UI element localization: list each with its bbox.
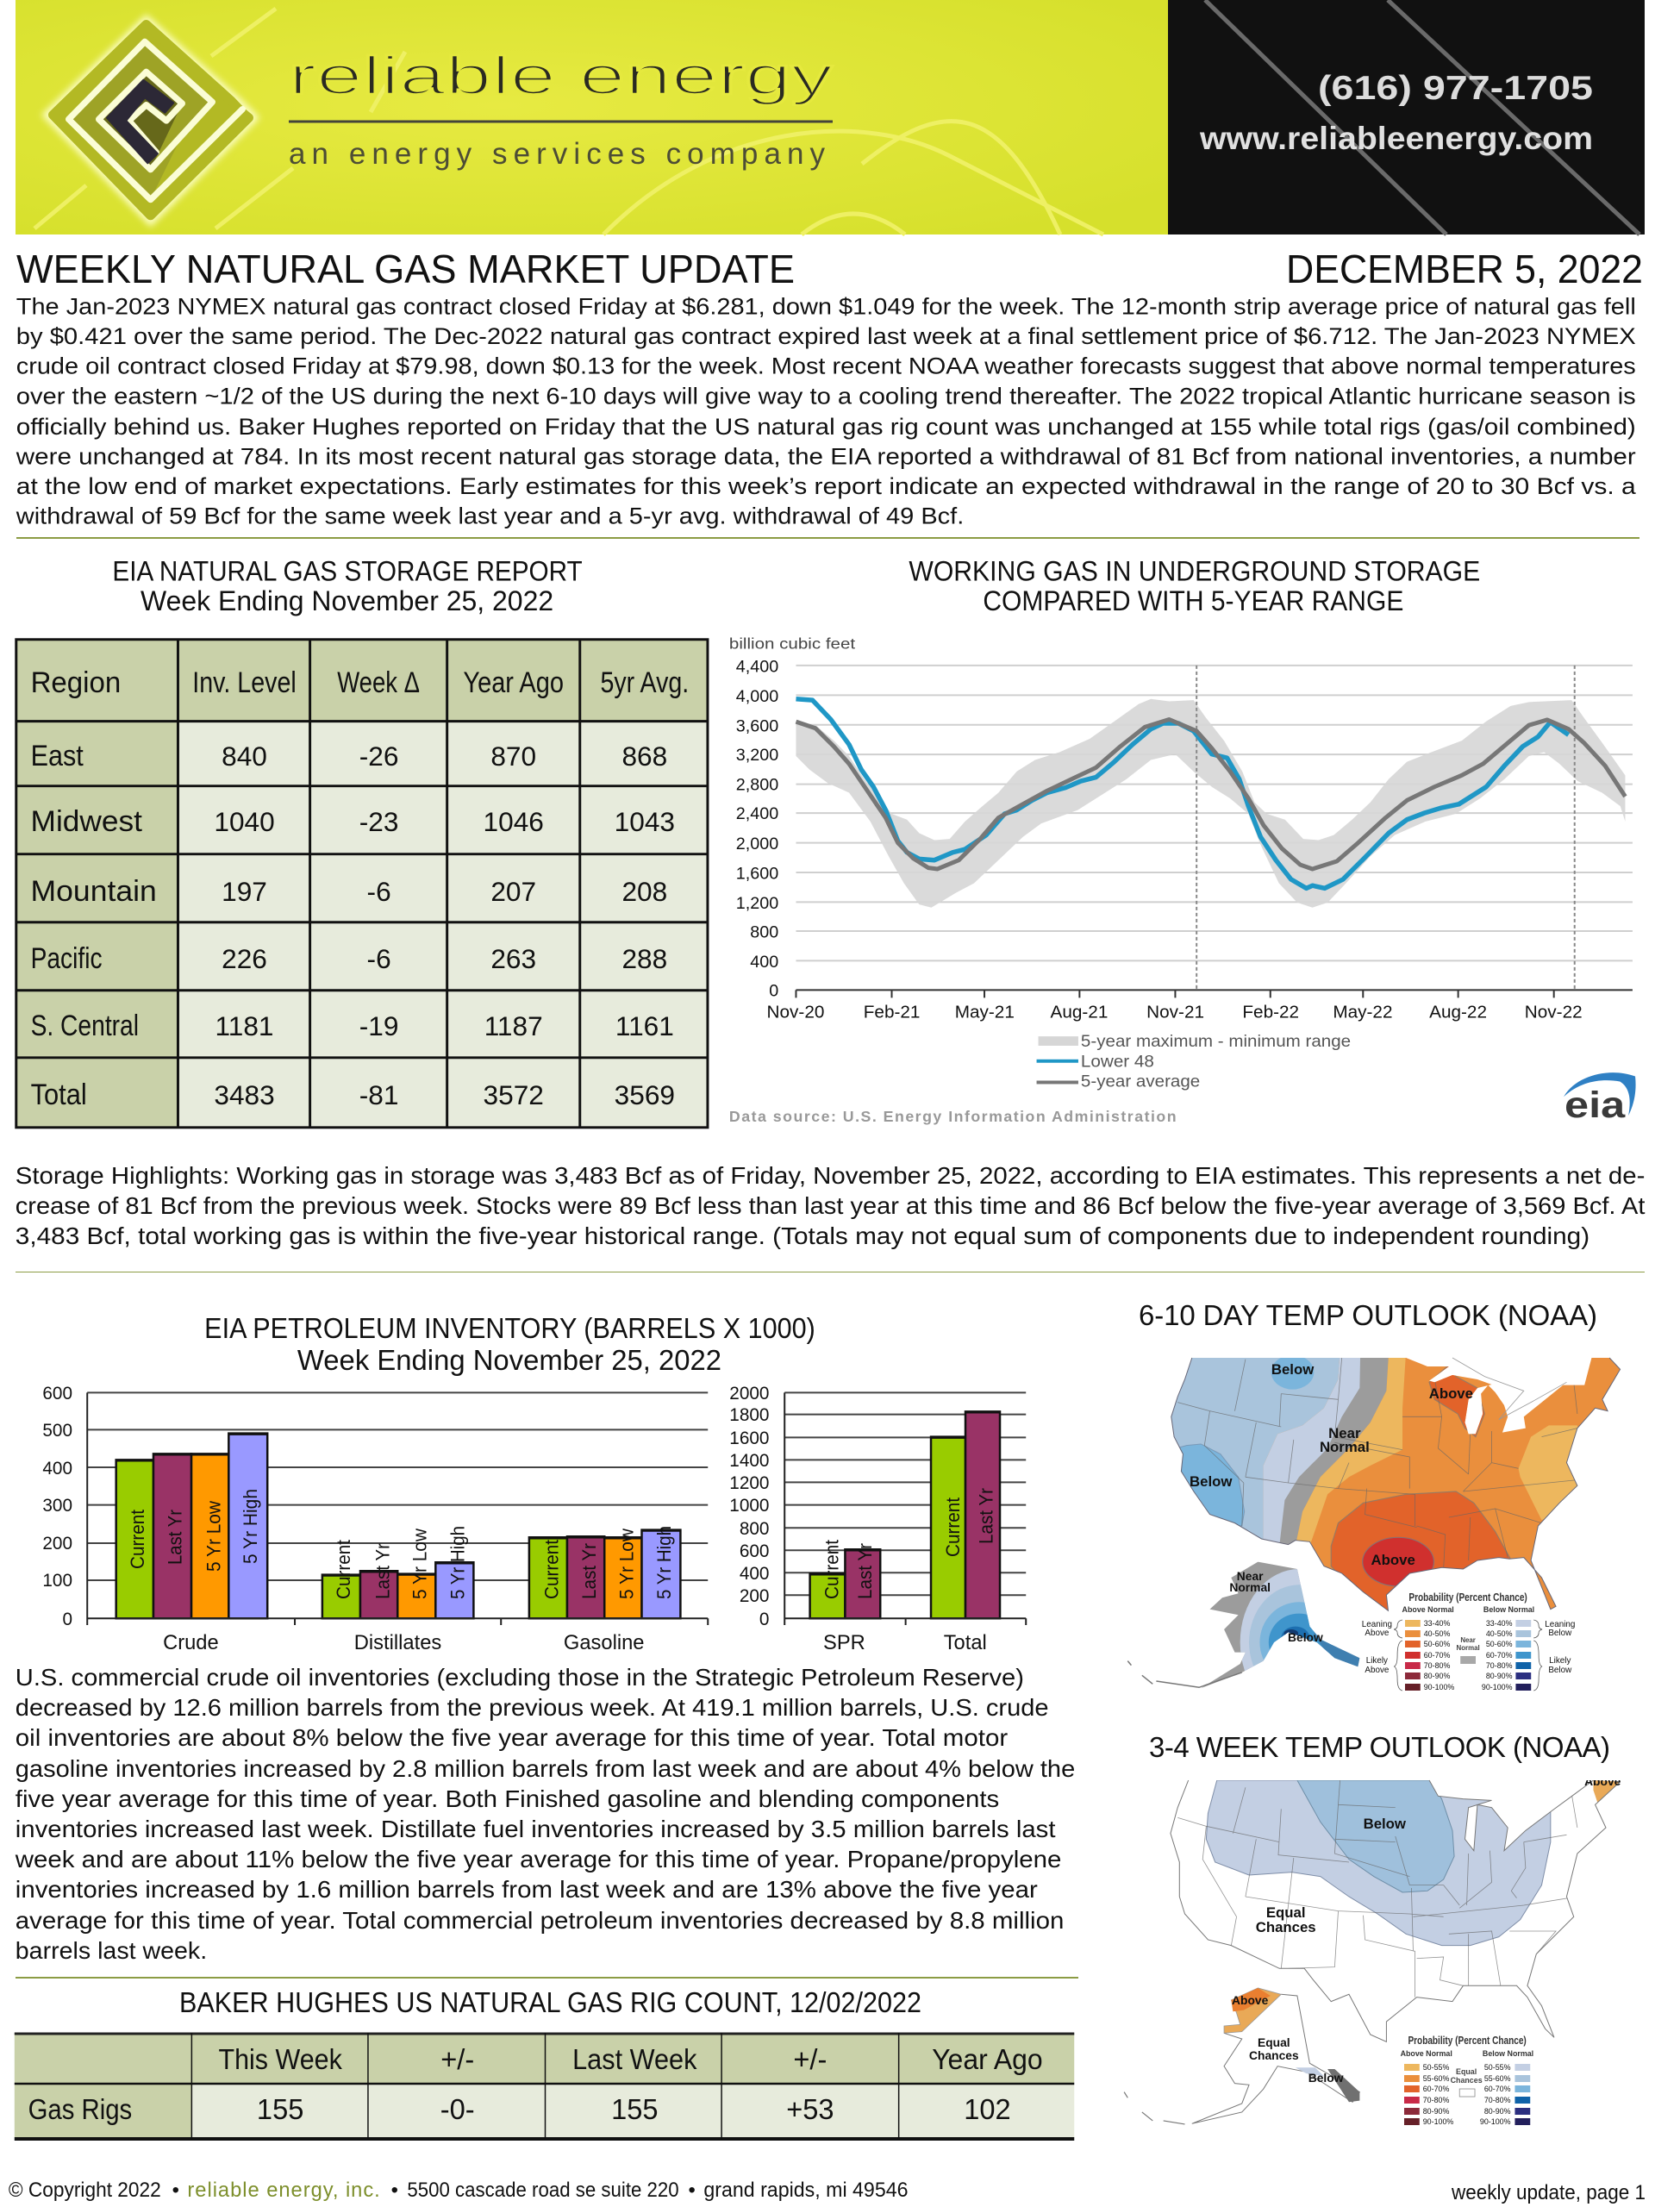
storage table [16, 640, 708, 1128]
tagline: an energy services company [289, 137, 826, 171]
rotated bar labels: Current [333, 1540, 354, 1599]
probability legend: Likely [1549, 1656, 1571, 1666]
rotated bar labels: Current [821, 1540, 842, 1599]
table region names: Midwest [31, 805, 142, 838]
rotated bar labels: Current [127, 1510, 148, 1569]
heading: working gas chart: WORKING GAS IN UNDERGROUND STORAGE [909, 555, 1480, 587]
probability legend: 33-40% [1486, 1619, 1513, 1628]
rig data row: +53 [786, 2093, 834, 2125]
company name: reliable energy [289, 47, 833, 106]
market summary text block: at the low end of market expectations. Early estimates for this week’s report indicate an expected withdrawal in the range of 20 to 30 Bcf vs. a [16, 472, 1637, 499]
chart legend: 5-year average [1081, 1072, 1200, 1091]
probability legend: Above [1365, 1629, 1390, 1638]
rig data row: Gas Rigs [28, 2093, 132, 2125]
Great Lakes lines [1452, 1358, 1566, 1420]
market summary text block: crude oil contract closed Friday at $79.98, down $0.13 for the week. Most recent NOAA weather forecasts suggest that above normal temperatures [16, 353, 1636, 379]
storage highlights text block [16, 1162, 1646, 1249]
right y axis labels: 200 [740, 1586, 769, 1606]
table header row: Region [31, 666, 121, 699]
petroleum commentary text block: week and are about 11% below the five year average for this time of year. Propane/propylene [15, 1846, 1061, 1873]
probability legend: 60-70% [1486, 1651, 1513, 1660]
probability legend [1362, 1591, 1575, 1691]
probability legend: 70-80% [1424, 1661, 1450, 1670]
probability legend: 80-90% [1424, 1672, 1450, 1680]
heading: storage report: Week Ending November 25, 2022 [141, 585, 553, 616]
Alaska outlook labels: Chances [1249, 2048, 1299, 2062]
heading: working gas chart [909, 555, 1480, 616]
rig header row: +/- [440, 2043, 474, 2075]
probability legend: 40-50% [1424, 1629, 1450, 1638]
category labels: Distillates [354, 1631, 441, 1654]
Alaska shading [1124, 1988, 1359, 2124]
table values: 870 [490, 741, 536, 772]
contact panel [1168, 0, 1645, 234]
x axis labels: Feb-22 [1242, 1002, 1299, 1022]
heading: petroleum inventory: EIA PETROLEUM INVENTORY (BARRELS X 1000) [204, 1312, 815, 1344]
table values: 840 [222, 741, 267, 772]
petroleum commentary text block: oil inventories are about 8% below the five year average for this time of year. Total motor [16, 1724, 1008, 1751]
probability legend: 50-60% [1486, 1640, 1513, 1648]
heading: petroleum inventory [204, 1312, 815, 1376]
table header row: Inv. Level [192, 666, 297, 699]
y axis labels: 800 [750, 923, 778, 942]
petroleum commentary text block: average for this time of year. Total commercial petroleum inventories decreased by 8.8 million [16, 1907, 1064, 1934]
Alaska outlook labels: Equal [1258, 2035, 1290, 2049]
outlook region labels: Below [1364, 1816, 1407, 1832]
petroleum commentary text block: U.S. commercial crude oil inventories (excluding those in the Strategic Petroleum Reserve) [16, 1664, 1024, 1691]
chart legend: 5-year maximum - minimum range [1081, 1032, 1351, 1051]
rig header row: Year Ago [932, 2043, 1043, 2075]
table values: 197 [222, 876, 267, 907]
footer: • [689, 2179, 696, 2202]
right y axis labels: 1000 [729, 1496, 769, 1516]
northeast above label [1572, 1767, 1632, 1788]
probability legend: 60-70% [1484, 2085, 1511, 2093]
probability legend: Below Normal [1483, 1605, 1534, 1614]
rotated bar labels: Last Yr [578, 1543, 600, 1599]
table region names: S. Central [31, 1010, 139, 1042]
right y axis labels: 1200 [729, 1473, 769, 1493]
Lower 48 line [796, 699, 1569, 888]
probability legend: 33-40% [1424, 1619, 1450, 1628]
icon: reliable energy diamond logo [41, 15, 259, 227]
rig header row: This Week [218, 2043, 342, 2075]
x axis labels: Nov-21 [1146, 1002, 1204, 1022]
Alaska outlook labels: Above [1232, 1993, 1269, 2007]
footer: • [172, 2179, 179, 2202]
table header row: Week Δ [337, 666, 420, 699]
northeast above label: Above [1584, 1774, 1621, 1788]
title: WEEKLY NATURAL GAS MARKET UPDATE [16, 247, 795, 291]
probability legend: 90-100% [1424, 1683, 1454, 1691]
probability legend: 50-55% [1484, 2063, 1511, 2072]
map region labels: Below [1190, 1473, 1233, 1490]
market summary text block: over the eastern ~1/2 of the US during the next 6-10 days will give way to a cooling trend thereafter. The 2022 tropical Atlantic hurricane season is [16, 382, 1636, 409]
Alaska region labels [1229, 1569, 1323, 1644]
5-year range band [796, 699, 1625, 908]
table values [214, 741, 675, 1110]
map region labels: Near [1328, 1425, 1361, 1441]
heading: working gas chart: COMPARED WITH 5-YEAR RANGE [983, 585, 1403, 616]
probability legend: 60-70% [1423, 2085, 1449, 2093]
right y axis labels: 1800 [729, 1405, 769, 1425]
probability legend: 70-80% [1423, 2096, 1449, 2104]
market summary text block: withdrawal of 59 Bcf for the same week last year and a 5-yr avg. withdrawal of 49 Bcf. [16, 503, 964, 529]
y axis labels: 4,000 [736, 687, 778, 706]
table values: -19 [359, 1010, 398, 1041]
market summary text block [16, 293, 1637, 529]
probability legend: 90-100% [1423, 2117, 1453, 2126]
probability legend: 50-55% [1423, 2063, 1449, 2072]
rig header row [218, 2043, 1043, 2075]
heading: 3-4 week outlook: 3-4 WEEK TEMP OUTLOOK (NOAA) [1149, 1731, 1610, 1763]
outlook region labels: Equal [1266, 1904, 1306, 1921]
y axis labels: 3,600 [736, 716, 778, 735]
table region names: East [31, 740, 84, 772]
data source: Data source: U.S. Energy Information Administration [729, 1108, 1177, 1125]
probability legend: 50-60% [1424, 1640, 1450, 1648]
table values: -6 [367, 876, 391, 907]
left y axis labels: 0 [62, 1610, 72, 1629]
chart bars [87, 1392, 1026, 1625]
probability legend: Below [1548, 1629, 1572, 1638]
table values: 226 [222, 943, 267, 974]
table values: 288 [621, 943, 667, 974]
x axis labels: May-21 [955, 1002, 1015, 1022]
y axis labels: 2,400 [736, 804, 778, 823]
probability legend: 90-100% [1482, 1683, 1513, 1691]
table values: 1040 [214, 806, 275, 837]
map region labels: Above [1429, 1385, 1473, 1402]
petroleum bar charts [42, 1384, 1026, 1654]
probability legend: Likely [1366, 1656, 1388, 1666]
working gas line chart [729, 635, 1636, 1125]
contact panel: www.reliableenergy.com [1199, 121, 1593, 156]
left y axis labels: 200 [42, 1534, 72, 1554]
table values: -6 [367, 943, 391, 974]
outlook region labels [1256, 1816, 1407, 1935]
petroleum commentary text block: decreased by 12.6 million barrels from the previous week. At 419.1 million barrels, U.S. crude [16, 1694, 1049, 1721]
probability legend: Above Normal [1402, 1605, 1454, 1614]
icon: eia logo: eia [1564, 1085, 1626, 1125]
petroleum commentary text block: inventories increased by 1.6 million barrels from last week and are 13% above the five year [16, 1876, 1038, 1903]
probability legend: 90-100% [1480, 2117, 1511, 2126]
rotated bar labels: 5 Yr High [240, 1489, 261, 1564]
left y axis labels: 500 [42, 1421, 72, 1441]
category labels: SPR [823, 1631, 865, 1654]
probability legend [1401, 2034, 1533, 2126]
y axis labels: 1,200 [736, 894, 778, 913]
footer [9, 2179, 909, 2202]
axis unit: billion cubic feet [729, 635, 855, 653]
right y axis labels: 2000 [729, 1384, 769, 1404]
table values: 3483 [214, 1079, 275, 1110]
Alaska outlook labels: Below [1308, 2071, 1344, 2085]
y axis labels: 400 [750, 953, 778, 972]
left y axis labels: 300 [42, 1496, 72, 1516]
lime logo panel [16, 0, 1168, 234]
probability legend: Normal [1457, 1644, 1480, 1652]
probability legend: Below [1548, 1666, 1572, 1675]
table values: -23 [359, 806, 398, 837]
rotated bar labels: 5 Yr Low [615, 1529, 637, 1599]
storage highlights text block: 3,483 Bcf, total working gas is within the five-year historical range. (Totals may not equal sum of components due to independent rounding) [16, 1222, 1589, 1249]
rig count table [15, 2033, 1074, 2140]
y axis labels: 2,800 [736, 776, 778, 795]
probability legend: 80-90% [1423, 2107, 1449, 2116]
y axis labels [736, 657, 778, 1001]
rotated bar labels: 5 Yr Low [203, 1501, 224, 1572]
table values: 1161 [615, 1010, 674, 1041]
table values: 3569 [615, 1079, 675, 1110]
right y axis labels [729, 1384, 769, 1629]
petroleum commentary text block: five year average for this time of year. Both Finished gasoline and blending components [16, 1785, 999, 1812]
y axis labels: 4,400 [736, 657, 778, 676]
table values: 263 [490, 943, 536, 974]
probability legend: Below Normal [1483, 2049, 1533, 2058]
table values: 868 [621, 741, 667, 772]
heading: petroleum inventory: Week Ending November 25, 2022 [297, 1344, 721, 1376]
table values: -81 [359, 1079, 398, 1110]
rotated bar labels [127, 1488, 996, 1599]
rotated bar labels: Last Yr [372, 1543, 394, 1599]
page number: weekly update, page 1 [1451, 2181, 1646, 2204]
category labels: Crude [163, 1631, 219, 1654]
map region labels: Below [1271, 1361, 1315, 1378]
map: 6-10 day temperature outlook [1127, 1351, 1627, 1716]
rig header row: Last Week [572, 2043, 697, 2075]
heading: rig count: BAKER HUGHES US NATURAL GAS RIG COUNT, 12/02/2022 [179, 1986, 921, 2018]
table values: 1187 [484, 1010, 543, 1041]
footer: reliable energy, inc. [187, 2179, 380, 2202]
probability legend: 70-80% [1484, 2096, 1511, 2104]
probability legend: Chances [1451, 2076, 1483, 2085]
chart legend: Lower 48 [1081, 1053, 1154, 1072]
probability legend: 60-70% [1424, 1651, 1450, 1660]
table values: 208 [621, 876, 667, 907]
date: DECEMBER 5, 2022 [1286, 247, 1643, 291]
footer: © Copyright 2022 [9, 2179, 161, 2202]
chart legend [1037, 1032, 1351, 1091]
heading: 6-10 day outlook: 6-10 DAY TEMP OUTLOOK (NOAA) [1139, 1299, 1597, 1331]
table region names [31, 740, 157, 1111]
rotated bar labels: Last Yr [975, 1488, 996, 1544]
y axis labels: 1,600 [736, 864, 778, 883]
right y axis labels: 400 [740, 1564, 769, 1584]
right y axis labels: 1400 [729, 1451, 769, 1471]
probability legend: Leaning [1545, 1620, 1575, 1629]
probability legend: Probability (Percent Chance) [1408, 2034, 1527, 2047]
probability legend: Leaning [1362, 1620, 1392, 1629]
probability legend: 55-60% [1423, 2074, 1449, 2083]
5-year average line [796, 719, 1625, 869]
category labels: Total [944, 1631, 987, 1654]
x axis labels: Nov-22 [1525, 1002, 1583, 1022]
y axis labels: 3,200 [736, 746, 778, 765]
probability legend: 40-50% [1486, 1629, 1513, 1638]
contiguous US shading [1171, 1780, 1622, 2041]
table header row [31, 666, 689, 699]
rig data row: 155 [611, 2093, 658, 2125]
footer: • [391, 2179, 398, 2202]
right y axis labels: 600 [740, 1541, 769, 1561]
petroleum commentary text block: gasoline inventories increased by 2.8 million barrels from last week and are about 4% below the [16, 1755, 1075, 1782]
table header row: 5yr Avg. [600, 666, 689, 699]
chart plot [796, 666, 1633, 997]
table region names: Mountain [31, 875, 157, 908]
category labels [163, 1631, 987, 1654]
left y axis labels: 100 [42, 1571, 72, 1591]
Alaska region labels: Near [1237, 1569, 1264, 1583]
table values: 3572 [484, 1079, 544, 1110]
probability legend: Above [1365, 1666, 1390, 1675]
table header row: Year Ago [463, 666, 564, 699]
map region labels: Normal [1320, 1439, 1370, 1455]
x axis labels: Nov-20 [767, 1002, 824, 1022]
market summary text block: The Jan-2023 NYMEX natural gas contract closed Friday at $6.281, down $1.049 for the week. The 12-month strip average price of natural gas fell [16, 293, 1636, 320]
probability legend: Equal [1456, 2067, 1477, 2076]
market summary text block: were unchanged at 784. In its most recent natural gas storage data, the EIA reported a withdrawal of 81 Bcf from national inventories, a number [16, 442, 1636, 469]
y axis labels: 0 [769, 982, 778, 1001]
rotated bar labels: 5 Yr Low [409, 1529, 431, 1599]
left y axis labels: 600 [42, 1384, 72, 1404]
x axis labels: Feb-21 [864, 1002, 920, 1022]
heading: storage report [112, 555, 583, 616]
probability legend: Above Normal [1401, 2049, 1452, 2058]
rotated bar labels: Last Yr [165, 1510, 185, 1565]
table values: 207 [490, 876, 536, 907]
y axis labels: 2,000 [736, 835, 778, 853]
x axis labels: Aug-22 [1429, 1002, 1487, 1022]
icon: eia logo [1564, 1072, 1636, 1125]
table values: -26 [359, 741, 398, 772]
rule [289, 121, 833, 122]
probability legend: Probability (Percent Chance) [1408, 1591, 1527, 1604]
rig data row: 155 [257, 2093, 303, 2125]
contact panel: (616) 977-1705 [1318, 70, 1593, 107]
map: 3-4 week temperature outlook [1124, 1767, 1632, 2126]
right y axis labels: 0 [759, 1610, 769, 1629]
rig data row [28, 2093, 1011, 2125]
probability legend: 70-80% [1486, 1661, 1513, 1670]
Alaska shading [1127, 1552, 1371, 1716]
left y axis labels: 400 [42, 1459, 72, 1479]
rotated bar labels: Current [942, 1497, 964, 1557]
probability legend: 55-60% [1484, 2074, 1511, 2083]
storage highlights text block: crease of 81 Bcf from the previous week. Stocks were 89 Bcf less than last year at this time and 86 Bcf below the five-year average of 3,569 Bcf. At [16, 1192, 1646, 1219]
probability legend: 80-90% [1484, 2107, 1511, 2116]
x axis labels: May-22 [1333, 1002, 1392, 1022]
Alaska region labels: Normal [1229, 1580, 1271, 1594]
left y axis labels [42, 1384, 72, 1629]
Alaska outlook labels [1232, 1993, 1344, 2085]
right y axis labels: 1600 [729, 1429, 769, 1448]
storage highlights text block: Storage Highlights: Working gas in storage was 3,483 Bcf as of Friday, November 25, 2022, according to EIA estimates. This represents a net de- [16, 1162, 1645, 1189]
rotated bar labels: 5 Yr High [653, 1526, 675, 1599]
contiguous US shading [1171, 1357, 1621, 1612]
rig header row: +/- [793, 2043, 827, 2075]
outlook region labels: Chances [1256, 1919, 1316, 1935]
heading: storage report: EIA NATURAL GAS STORAGE REPORT [112, 555, 583, 587]
table region names: Total [31, 1078, 87, 1111]
right y axis labels: 800 [740, 1519, 769, 1539]
category labels: Gasoline [564, 1631, 645, 1654]
footer: grand rapids, mi 49546 [703, 2179, 909, 2202]
Alaska region labels: Below [1288, 1630, 1323, 1644]
table values: 1181 [215, 1010, 274, 1041]
map region labels: Above [1371, 1552, 1415, 1568]
rotated bar labels: 5 Yr High [447, 1526, 469, 1599]
header banner [16, 0, 1645, 234]
x axis labels [767, 1002, 1583, 1022]
petroleum commentary text block: barrels last week. [16, 1937, 207, 1964]
table values: 1046 [484, 806, 544, 837]
market summary text block: by $0.421 over the same period. The Dec-2022 natural gas contract expired last week at a final settlement price of $6.712. The Jan-2023 NYMEX [16, 322, 1636, 349]
x axis labels: Aug-21 [1051, 1002, 1108, 1022]
map region labels [1190, 1361, 1473, 1568]
rotated bar labels: Current [540, 1540, 562, 1599]
petroleum commentary text block: inventories increased last week. Distillate fuel inventories increased by 3.5 million barrels last [16, 1816, 1056, 1842]
table values: 1043 [615, 806, 675, 837]
probability legend: Near [1460, 1636, 1476, 1644]
rotated bar labels: Last Yr [854, 1543, 876, 1599]
market summary text block: officially behind us. Baker Hughes reported on Friday that the US natural gas rig count was unchanged at 155 while total rigs (gas/oil combined) [16, 413, 1636, 440]
petroleum commentary text block [15, 1664, 1075, 1964]
probability legend: 80-90% [1486, 1672, 1513, 1680]
footer: 5500 cascade road se suite 220 [407, 2179, 679, 2202]
rig data row: -0- [440, 2093, 475, 2125]
rig data row: 102 [964, 2093, 1011, 2125]
table region names: Pacific [31, 942, 103, 975]
